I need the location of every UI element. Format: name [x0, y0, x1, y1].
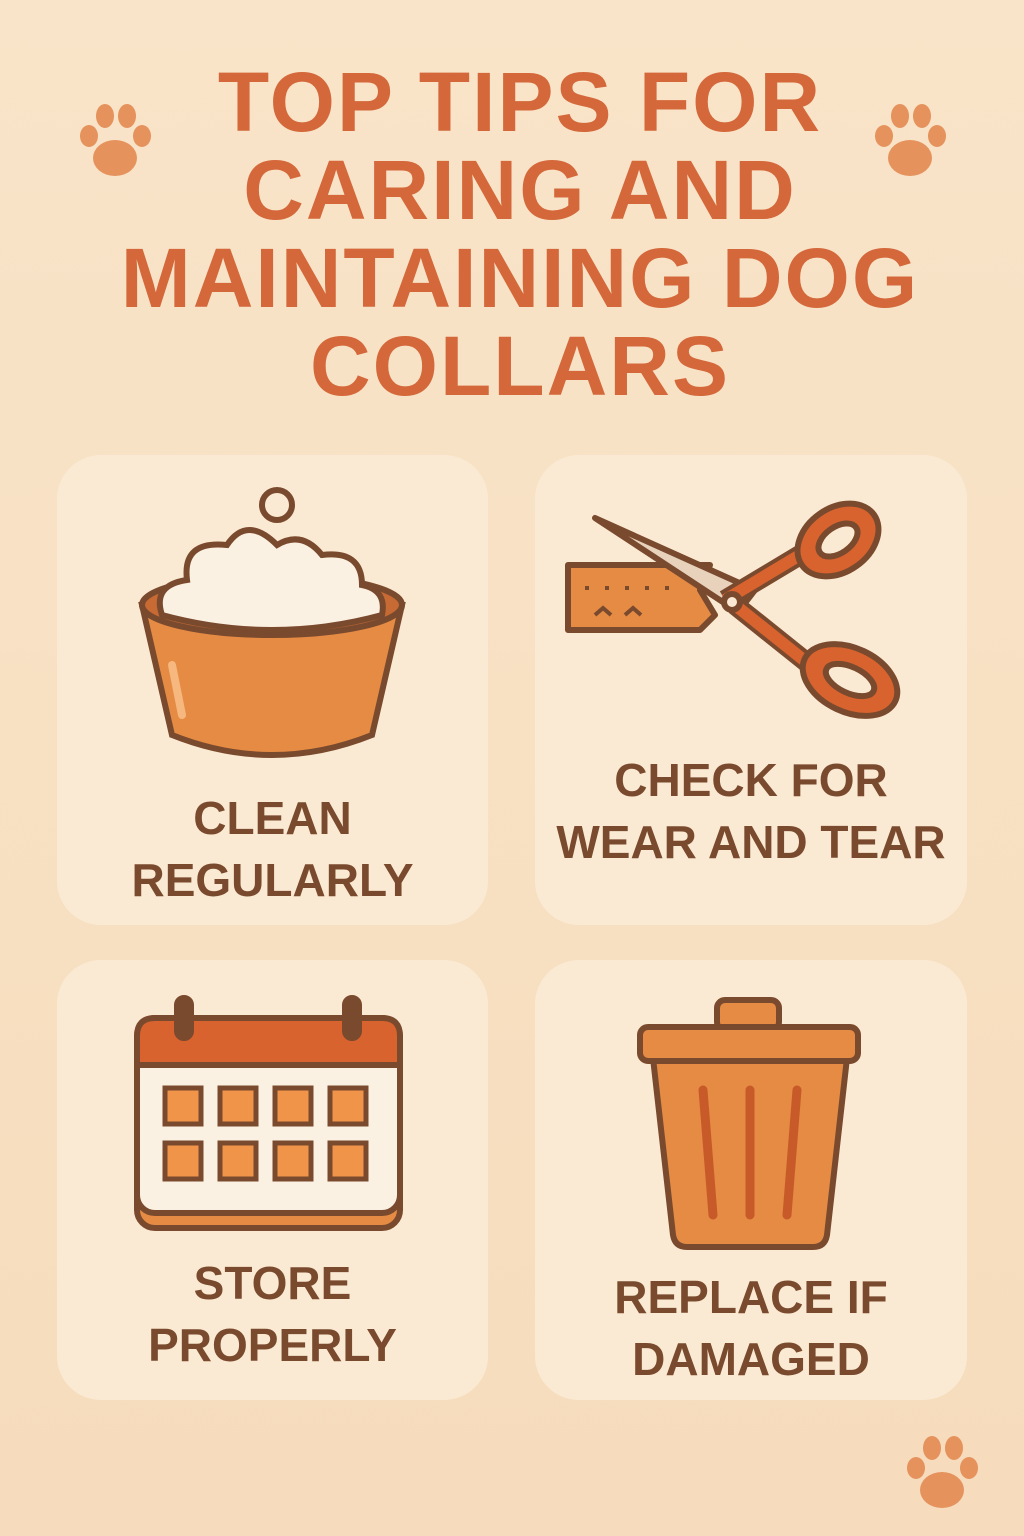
- icon: scissors and collar: [565, 500, 900, 719]
- label: REGULARLY: [132, 854, 414, 906]
- panel: store properly: [57, 960, 488, 1400]
- title: MAINTAINING DOG: [121, 231, 919, 325]
- panel: replace if damaged: [535, 960, 967, 1400]
- panel: clean regularly: [57, 455, 488, 925]
- icon: trash can: [637, 997, 861, 1250]
- title: TOP TIPS FOR: [218, 55, 822, 149]
- title: [121, 55, 919, 413]
- label: CHECK FOR: [614, 754, 888, 806]
- label: PROPERLY: [148, 1319, 397, 1371]
- label: WEAR AND TEAR: [556, 816, 946, 868]
- label: [148, 1257, 397, 1371]
- label: [556, 754, 946, 868]
- label: [614, 1271, 888, 1385]
- label: STORE: [194, 1257, 351, 1309]
- label: DAMAGED: [632, 1333, 870, 1385]
- title: CARING AND: [243, 143, 797, 237]
- title: COLLARS: [310, 319, 730, 413]
- icon: bowl with suds: [138, 487, 406, 758]
- icon: paw bottom right: [907, 1436, 978, 1508]
- label: CLEAN: [193, 792, 352, 844]
- label: REPLACE IF: [614, 1271, 888, 1323]
- icon: paw top right: [875, 104, 946, 176]
- icon: calendar: [134, 995, 403, 1231]
- label: [132, 792, 414, 906]
- icon: paw top left: [80, 104, 151, 176]
- panel: check for wear and tear: [535, 455, 967, 925]
